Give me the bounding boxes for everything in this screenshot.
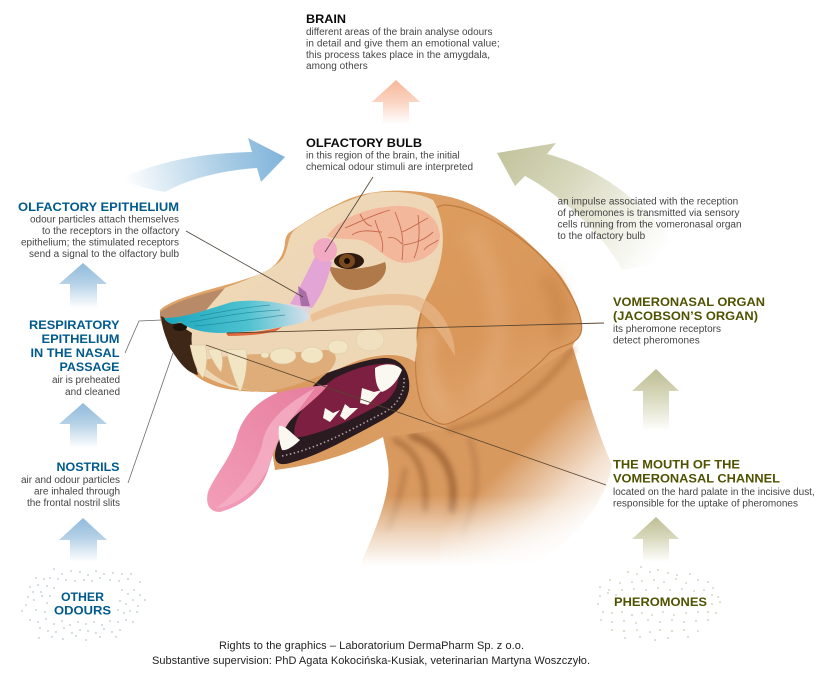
neck shading folds <box>388 350 572 535</box>
mouth <box>275 358 409 464</box>
heading and text: nostrils: air and odour particles <box>21 475 120 486</box>
label: other odours: OTHER <box>61 590 104 604</box>
particle cloud: pheromones <box>598 567 720 640</box>
leader: nostrils <box>128 353 173 483</box>
olfactory tract <box>290 255 332 308</box>
olfactory bulb <box>313 238 337 262</box>
tongue centre light <box>216 388 315 508</box>
arrow: olive pheromones to channel <box>632 517 679 562</box>
heading and text: olfactory bulb: chemical odour stimuli are interpreted <box>306 162 473 173</box>
heading and text: nostrils <box>21 460 120 509</box>
text: impulse note: an impulse associated with the reception <box>558 196 738 208</box>
brain <box>327 206 440 263</box>
heading and text: mouth of the vomeronasal channel: THE MOUTH OF THE <box>613 458 740 472</box>
arrow: blue nostrils to respiratory <box>59 403 107 448</box>
heading and text: respiratory epithelium: air is preheated <box>52 375 120 386</box>
heading and text: respiratory epithelium <box>29 318 120 398</box>
arrow: blue odours to nostrils <box>59 518 107 562</box>
neck fade: lower right <box>440 400 660 600</box>
heading and text: brain: different areas of the brain analyse odours <box>306 27 492 38</box>
nose <box>160 288 225 325</box>
arrow: curved olive from vomeronasal organ <box>497 143 688 270</box>
heading and text: mouth of the vomeronasal channel: located on the hard palate in the incisive dust, <box>613 487 815 498</box>
heading and text: mouth of the vomeronasal channel: responsible for the uptake of pheromones <box>613 498 798 510</box>
particle cloud: other odours <box>22 569 145 640</box>
upper muzzle fur below teeth <box>205 350 336 392</box>
heading and text: olfactory epithelium <box>18 200 180 260</box>
heading and text: respiratory epithelium: PASSAGE <box>60 360 120 374</box>
heading and text: vomeronasal organ: (JACOBSON’S ORGAN) <box>613 309 758 323</box>
brain folds <box>345 210 438 260</box>
ear <box>415 205 582 424</box>
heading and text: nostrils: are inhaled through <box>34 486 120 498</box>
tongue <box>207 385 328 512</box>
arrow: brain <box>372 80 420 124</box>
heading and text: olfactory bulb: OLFACTORY BULB <box>306 136 422 150</box>
heading and text: nostrils: NOSTRILS <box>56 460 120 474</box>
arrow: curved blue to olfactory bulb <box>118 138 285 192</box>
heading and text: brain: this process takes place in the amygdala, <box>306 50 490 61</box>
heading and text: respiratory epithelium: RESPIRATORY <box>29 318 120 332</box>
teeth upper <box>190 329 384 392</box>
heading and text: mouth of the vomeronasal channel <box>613 458 815 510</box>
label: other odours <box>54 590 111 618</box>
leader: olfactory epithelium <box>186 231 303 297</box>
heading and text: nostrils: the frontal nostril slits <box>27 498 120 509</box>
heading and text: vomeronasal organ: detect pheromones <box>613 336 700 346</box>
text: impulse note: of pheromones is transmitted via sensory <box>558 208 740 219</box>
olfactory receptors <box>298 286 310 306</box>
label: pheromones: PHEROMONES <box>614 595 707 609</box>
arrow: blue respiratory to epithelium <box>59 263 107 308</box>
heading and text: vomeronasal organ: VOMERONASAL ORGAN <box>613 295 765 309</box>
heading and text: olfactory epithelium: odour particles attach themselves <box>30 214 179 226</box>
mouth interior <box>294 364 398 438</box>
teal fibres <box>190 305 285 326</box>
eye socket <box>329 262 386 290</box>
olfactory epithelium teal <box>164 301 309 333</box>
leader: bulb <box>325 177 373 252</box>
text: impulse note <box>558 196 742 242</box>
arrow: olive channel to organ <box>632 369 679 431</box>
footer credits: Substantive supervision: PhD Agata Kokocińska-Kusiak, veterinarian Martyna Woszczyło. <box>152 655 590 667</box>
text: impulse note: cells running from the vomeronasal organ <box>558 220 742 230</box>
heading and text: respiratory epithelium: IN THE NASAL <box>30 346 120 360</box>
leader: vomeronasal organ <box>227 323 604 333</box>
heading and text: brain: BRAIN <box>306 12 346 26</box>
label: other odours: ODOURS <box>54 604 111 618</box>
neck fade: bottom <box>340 490 660 600</box>
illustration: dog head <box>160 191 660 600</box>
footer credits <box>152 640 590 667</box>
heading and text: olfactory epithelium: send a signal to the olfactory bulb <box>29 249 179 260</box>
eye <box>334 253 364 269</box>
heading and text: brain: among others <box>306 61 368 72</box>
heading and text: olfactory epithelium: to the receptors in the olfactory <box>42 226 180 237</box>
heading and text: vomeronasal organ <box>613 295 765 346</box>
nostril <box>173 323 187 331</box>
nose and lip dark <box>161 316 198 375</box>
fur: neck <box>352 345 612 585</box>
heading and text: olfactory bulb <box>306 136 473 173</box>
heading and text: brain <box>306 12 500 72</box>
heading and text: respiratory epithelium: and cleaned <box>65 387 120 398</box>
lip speckle <box>282 378 404 456</box>
text: impulse note: to the olfactory bulb <box>558 231 646 242</box>
vomeronasal organ <box>226 327 282 336</box>
olfactory tract fade <box>240 304 312 328</box>
lower and upper teeth <box>279 364 402 450</box>
footer credits: Rights to the graphics – Laboratorium DermaPharm Sp. z o.o. <box>219 640 524 652</box>
leader: respiratory epithelium <box>125 320 162 353</box>
heading and text: olfactory epithelium: epithelium; the stimulated receptors <box>21 238 179 248</box>
heading and text: brain: in detail and give them an emotional value; <box>306 38 500 50</box>
heading and text: respiratory epithelium: EPITHELIUM <box>42 332 120 346</box>
nasal passage band <box>310 294 455 356</box>
ear highlights <box>428 230 560 410</box>
cut-away skull <box>176 192 443 392</box>
heading and text: olfactory bulb: in this region of the brain, the initial <box>306 150 460 162</box>
leader: vomeronasal channel <box>206 345 606 485</box>
fur: head <box>160 191 579 470</box>
heading and text: mouth of the vomeronasal channel: VOMERONASAL CHANNEL <box>613 472 780 486</box>
heading and text: vomeronasal organ: its pheromone receptors <box>613 324 721 335</box>
heading and text: olfactory epithelium: OLFACTORY EPITHELIUM <box>18 200 179 214</box>
